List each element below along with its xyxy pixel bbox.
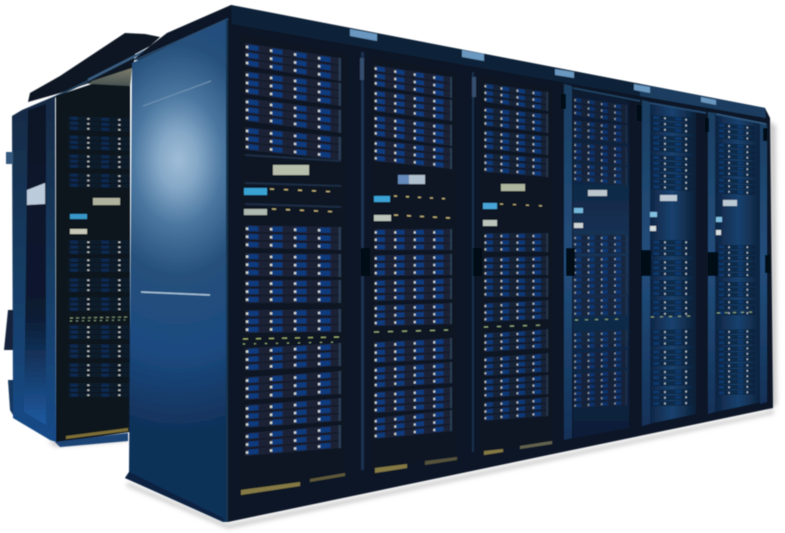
rack 5 — [648, 102, 696, 424]
back cabinet left door — [4, 96, 56, 442]
ground and edge shadow — [48, 120, 777, 529]
panel upper seam — [143, 81, 211, 106]
rack 2 — [371, 56, 457, 473]
back cabinet — [4, 33, 160, 447]
rack 6 — [715, 113, 762, 412]
back cabinet top rail — [28, 33, 160, 102]
top beam — [231, 5, 766, 118]
rack 4 — [573, 88, 629, 438]
rack 3 — [481, 75, 552, 455]
back cabinet open interior — [55, 84, 130, 447]
door handles — [361, 94, 770, 276]
main cabinet body — [133, 5, 773, 522]
beam name plates — [350, 29, 716, 105]
side panel — [125, 18, 228, 522]
door frames and posts — [360, 52, 767, 470]
rack 1 — [241, 33, 347, 498]
panel lower seam — [141, 292, 210, 295]
